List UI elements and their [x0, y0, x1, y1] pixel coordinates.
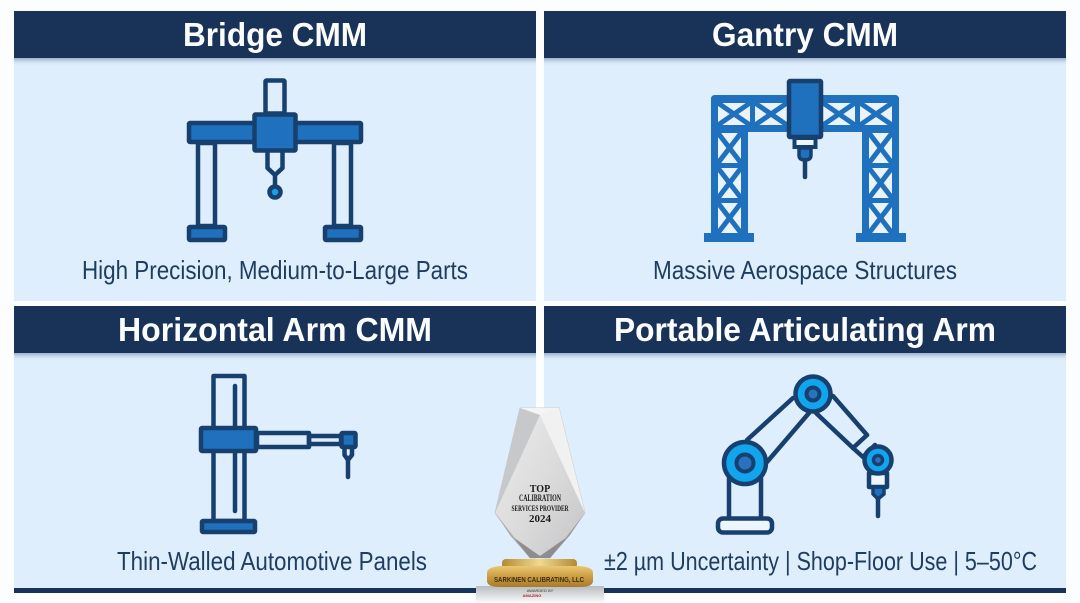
- icon: gantry CMM: [704, 81, 906, 242]
- award text: TOP: [530, 484, 550, 495]
- heading: Horizontal Arm CMM: [14, 306, 536, 353]
- caption: horizontal arm: Thin-Walled Automotive Panels: [117, 546, 427, 576]
- panel: Bridge CMM: [14, 11, 536, 301]
- caption: gantry: Massive Aerospace Structures: [653, 255, 957, 285]
- icon: articulating arm: [718, 376, 892, 532]
- award text: 2024: [529, 513, 552, 525]
- awarded by: [523, 588, 554, 598]
- icon: bridge CMM: [189, 80, 361, 240]
- heading: Horizontal Arm CMM: Horizontal Arm CMM: [118, 311, 432, 348]
- icon: horizontal arm CMM: [201, 376, 356, 532]
- heading: Gantry CMM: [544, 11, 1066, 58]
- award text: SERVICES PROVIDER: [512, 503, 569, 513]
- award recipient: SARKINEN CALIBRATING, LLC: [494, 577, 584, 584]
- heading: Bridge CMM: Bridge CMM: [183, 16, 367, 53]
- awarded by: AWARDED BY: [527, 588, 554, 593]
- heading: Portable Articulating Arm: [544, 306, 1066, 353]
- heading: Portable Articulating Arm: Portable Articulating Arm: [614, 311, 996, 348]
- panel: Horizontal Arm CMM: [14, 306, 536, 593]
- heading: Gantry CMM: Gantry CMM: [712, 16, 898, 53]
- awarded by: AMAZING: [523, 593, 541, 598]
- heading: Bridge CMM: [14, 11, 536, 58]
- panel: Gantry CMM: [544, 11, 1066, 301]
- caption: bridge: High Precision, Medium-to-Large Parts: [82, 255, 468, 285]
- award text: CALIBRATION: [519, 493, 561, 503]
- award trophy: [476, 408, 604, 603]
- panel: Portable Articulating Arm: [544, 306, 1066, 593]
- award text: [512, 484, 569, 525]
- bottom rule: [14, 588, 1066, 593]
